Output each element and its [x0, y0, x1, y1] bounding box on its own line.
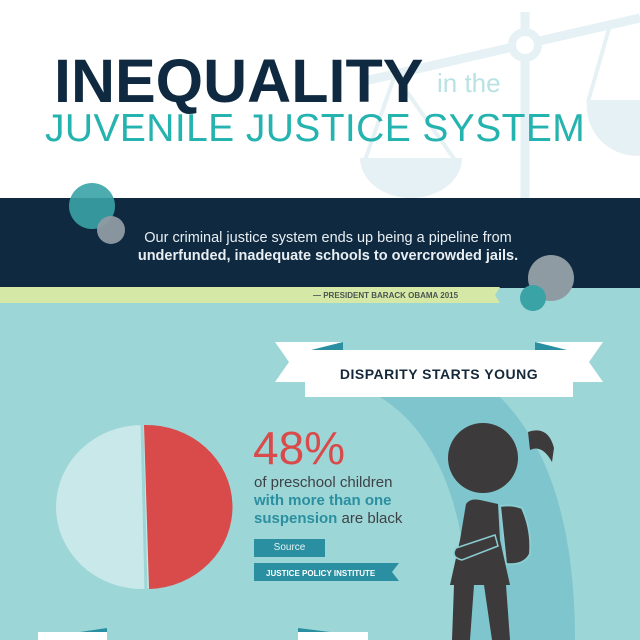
banner: DISPARITY STARTS YOUNG	[275, 342, 603, 397]
stat description: with more than one	[254, 492, 392, 509]
quote text: Our criminal justice system ends up being a pipeline from	[144, 230, 512, 246]
curved stripe	[380, 397, 575, 640]
attribution text: — PRESIDENT BARACK OBAMA 2015	[313, 291, 458, 300]
bottom ribbons	[38, 628, 368, 640]
quote text: underfunded, inadequate schools to overcrowded jails.	[138, 248, 518, 264]
stat description: of preschool children	[254, 474, 392, 491]
quote band	[0, 198, 640, 288]
title: JUVENILE JUSTICE SYSTEM: JUVENILE JUSTICE SYSTEM	[45, 107, 585, 150]
source name	[254, 563, 399, 581]
subtitle: in the: in the	[437, 68, 501, 98]
header background	[0, 0, 640, 198]
source label: Source	[274, 542, 305, 553]
quote text	[138, 230, 518, 264]
icon: speech bubbles left	[69, 183, 125, 244]
green attribution stripe	[0, 287, 500, 303]
banner: DISPARITY STARTS YOUNG: DISPARITY STARTS YOUNG	[340, 366, 538, 382]
icon: girl with backpack	[448, 423, 554, 640]
stat: 48%: 48%	[253, 422, 345, 474]
icon: scales of justice	[359, 12, 640, 198]
stat description	[254, 474, 402, 527]
source name: JUSTICE POLICY INSTITUTE	[266, 569, 376, 578]
source label	[254, 539, 325, 557]
title: INEQUALITY: INEQUALITY	[54, 47, 423, 115]
stat description: suspension are black	[254, 510, 402, 527]
pie chart 48%	[56, 425, 232, 589]
icon: speech bubbles right	[520, 255, 574, 311]
